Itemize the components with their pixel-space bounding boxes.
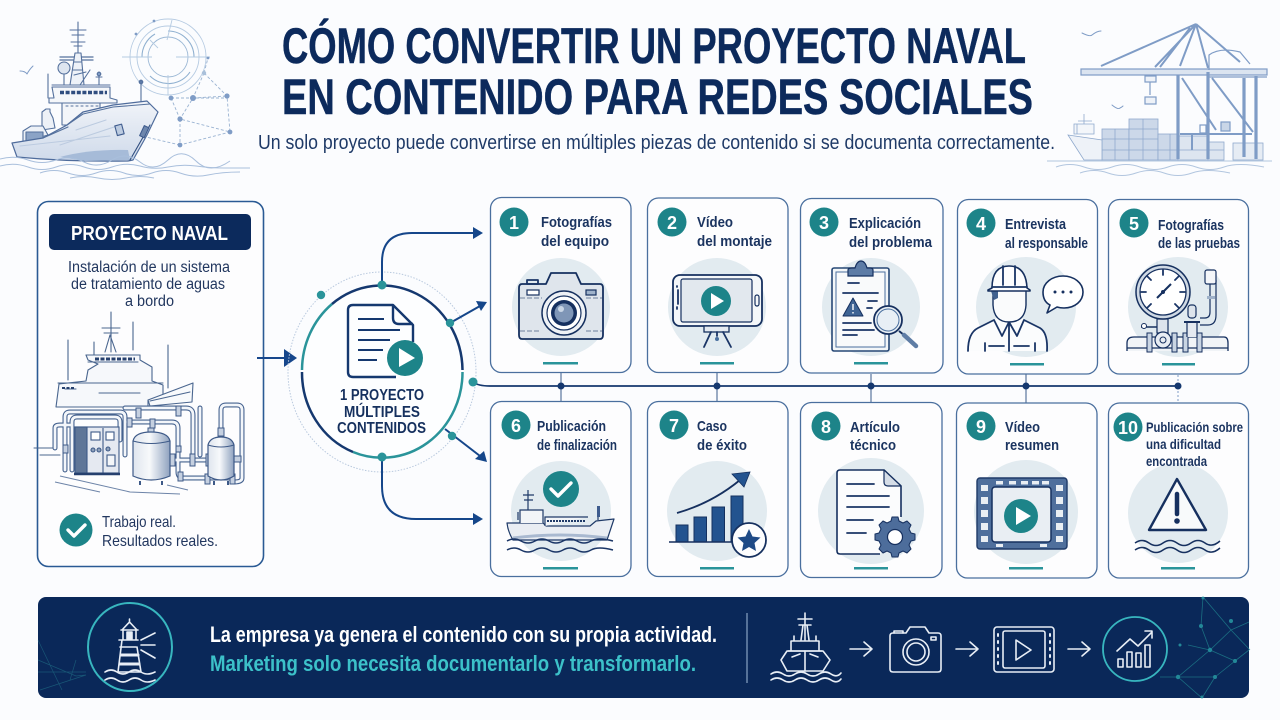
label: de éxito [697, 437, 747, 454]
tanks [133, 432, 170, 480]
label: Explicación [849, 215, 921, 232]
hub: 1 proyecto múltiples contenidos [288, 272, 476, 472]
hub connector dots [317, 280, 478, 462]
accent bar [1010, 363, 1044, 366]
accent bar [543, 362, 578, 364]
pipes [55, 405, 242, 482]
badge 1: 1 [509, 213, 519, 233]
label: Vídeo [1005, 419, 1040, 436]
card 10: publicación sobre una dificultad encontrada [1108, 403, 1248, 578]
badge 10: 10 [1118, 418, 1138, 438]
title: CÓMO CONVERTIR UN PROYECTO NAVAL [282, 18, 1026, 74]
badge 5 [1120, 208, 1148, 238]
right network decoration [1160, 596, 1250, 698]
badge 4 [966, 208, 996, 238]
text: closing statement: La empresa ya genera el contenido con su propia actividad. [210, 622, 717, 647]
label [697, 418, 747, 454]
badge 7: 7 [669, 416, 679, 436]
card 4: entrevista al responsable [958, 200, 1098, 374]
text: project description [68, 259, 230, 310]
label: Fotografías [1158, 217, 1224, 234]
label: Fotografías [541, 214, 612, 231]
lower superstructure [62, 103, 100, 125]
panel: proyecto naval [34, 202, 264, 566]
label: Publicación [537, 418, 606, 435]
illustration: navy ship with radar network [0, 19, 250, 180]
left network decoration [38, 640, 86, 690]
text: trabajo real: Trabajo real. [102, 514, 176, 531]
text: project description: a bordo [125, 293, 174, 310]
card 9: vídeo resumen [956, 403, 1097, 578]
label: resumen [1005, 437, 1059, 454]
badge 9: 9 [976, 417, 986, 437]
card 6: publicación de finalización [490, 402, 631, 576]
arrow [956, 642, 978, 656]
arrow: hub to lower row [445, 429, 487, 462]
arrow [850, 642, 872, 656]
hull [12, 101, 158, 161]
label: Vídeo [697, 214, 733, 231]
card 5: fotografías de las pruebas [1108, 200, 1248, 374]
label [537, 418, 617, 454]
card 1: fotografías del equipo [490, 198, 631, 372]
icon: phone on tripod [668, 258, 766, 356]
text: project description: de tratamiento de aguas [71, 276, 225, 293]
heading: proyecto naval: PROYECTO NAVAL [71, 223, 228, 245]
card 3: explicación del problema [800, 198, 943, 373]
accent bar [854, 362, 888, 364]
text: hub label: CONTENIDOS [337, 420, 426, 437]
label [1005, 216, 1088, 252]
card 7: caso de éxito [648, 402, 788, 576]
accent bar [1009, 567, 1043, 570]
accent bar [700, 362, 734, 364]
badge 7 [660, 410, 688, 440]
label [850, 419, 900, 454]
label: de las pruebas [1158, 235, 1240, 252]
icon: lighthouse [88, 603, 172, 691]
illustration: ship and water treatment system [34, 312, 242, 494]
label [1146, 419, 1243, 469]
icon: film strip with play [974, 460, 1078, 564]
badge 5: 5 [1129, 214, 1139, 234]
bridge [49, 87, 117, 103]
label [697, 214, 772, 250]
icon: clipboard with warning and magnifier [822, 258, 920, 356]
label: del montaje [697, 233, 772, 250]
arrow: hub to card row upper [450, 301, 487, 323]
label: de finalización [537, 437, 617, 454]
icon: pressure gauge [1127, 257, 1228, 357]
illustration: port crane and container ship [1047, 24, 1272, 176]
text: closing statement: Marketing solo necesita documentarlo y transformarlo. [210, 651, 696, 676]
mast and tower [70, 22, 86, 54]
label: Entrevista [1005, 216, 1067, 233]
badge 2 [658, 208, 686, 236]
badge 3: 3 [819, 213, 829, 233]
banner: closing message [38, 596, 1250, 698]
title: EN CONTENIDO PARA REDES SOCIALES [282, 69, 1033, 125]
badge 10 [1114, 412, 1142, 442]
heading: proyecto naval [49, 214, 251, 250]
badge 1 [500, 208, 528, 236]
badge 4: 4 [976, 214, 986, 234]
card 2: vídeo del montaje [648, 198, 788, 372]
label [1005, 419, 1059, 454]
label: una dificultad [1146, 436, 1221, 452]
timeline connector between cards [473, 373, 1182, 403]
label [1158, 217, 1240, 252]
badge 9 [966, 412, 996, 440]
icon: camera [512, 258, 610, 356]
arrow: project to hub [257, 349, 297, 367]
label [849, 215, 933, 251]
icon: warning triangle with waves [1128, 463, 1228, 563]
badge 6 [502, 410, 530, 440]
label [541, 214, 612, 250]
badge 6: 6 [511, 416, 521, 436]
badge 8 [812, 412, 840, 440]
badge 3 [810, 208, 838, 236]
label: Artículo [850, 419, 900, 436]
icon: engineer with speech bubble [968, 257, 1083, 357]
accent bar [854, 567, 888, 570]
icon: check [60, 514, 92, 546]
label: Caso [697, 418, 727, 435]
card 8: artículo técnico [800, 402, 942, 578]
label: técnico [850, 437, 896, 454]
icon: ship with check [507, 461, 614, 561]
arrow [1068, 642, 1090, 656]
title [282, 18, 1033, 125]
accent bar [543, 567, 578, 570]
icon: growth chart circle [1103, 617, 1167, 681]
arrow: hub to bottom row [382, 458, 483, 525]
icon: film outline [994, 627, 1054, 672]
control cabinet [74, 427, 120, 474]
accent bar [1161, 567, 1195, 570]
label: al responsable [1005, 235, 1088, 252]
text: project description: Instalación de un sistema [68, 259, 230, 276]
subtitle: Un solo proyecto puede convertirse en múltiples piezas de contenido si se documenta correctamente. [258, 132, 1055, 154]
text: hub label [337, 387, 426, 437]
label: Publicación sobre [1146, 419, 1243, 435]
badge 2: 2 [667, 213, 677, 233]
label: del equipo [541, 233, 609, 250]
text: trabajo real: Resultados reales. [102, 533, 218, 550]
arrow: hub to top row [382, 227, 483, 285]
icon: document with play [348, 305, 423, 377]
accent bar [700, 567, 734, 570]
label: del problema [849, 234, 933, 251]
text: hub label: 1 PROYECTO [340, 387, 424, 404]
badge 8: 8 [821, 417, 831, 437]
icon: ship outline [771, 613, 841, 682]
text: hub label: MÚLTIPLES [344, 402, 420, 421]
label: encontrada [1146, 453, 1207, 469]
icon: growth chart with star [667, 461, 767, 561]
icon: document with gear [818, 458, 924, 564]
accent bar [1162, 363, 1195, 366]
icon: camera outline [890, 627, 941, 672]
text: closing statement [210, 622, 717, 676]
valves [63, 406, 241, 484]
text: trabajo real [102, 514, 218, 550]
